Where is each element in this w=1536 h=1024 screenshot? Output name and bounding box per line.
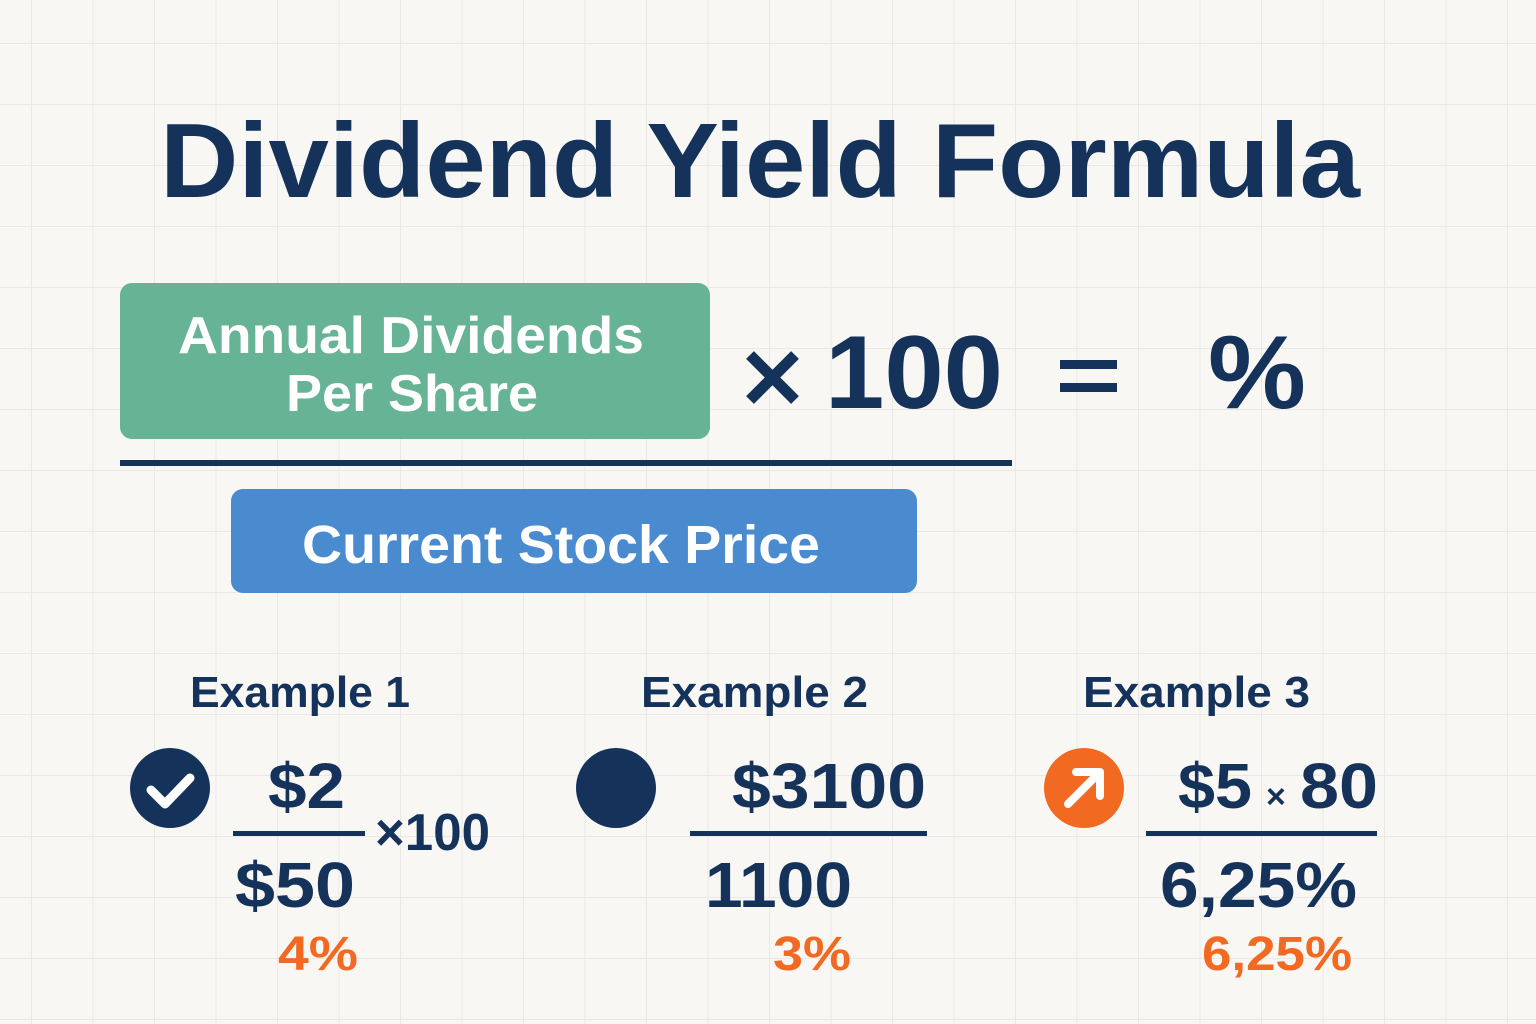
- example 1: $2: [268, 750, 345, 822]
- example 2: 3%: [773, 928, 851, 981]
- icon: check circle: [130, 748, 210, 828]
- denominator box: current stock price: Current Stock Price: [302, 515, 820, 575]
- example 3: 6,25%: [1160, 849, 1357, 921]
- numerator box: annual dividends: Annual Dividends: [178, 307, 644, 365]
- example 1: $50: [235, 849, 355, 921]
- example 2: 1100: [705, 849, 852, 921]
- example 1: 4%: [278, 928, 358, 981]
- title: Dividend Yield Formula: [160, 102, 1361, 220]
- denominator box: current stock price: [231, 489, 917, 593]
- example 2: $3100: [732, 750, 926, 822]
- example 1: Example 1: [190, 668, 410, 717]
- percent sign: %: [1208, 315, 1306, 431]
- example 2: Example 2: [641, 668, 868, 717]
- numerator box: annual dividends: [120, 283, 710, 439]
- example 3: 6,25%: [1202, 928, 1352, 981]
- icon: dark circle: [576, 748, 656, 828]
- multiplier ×100: [750, 315, 1003, 431]
- example 3: [1044, 668, 1378, 981]
- example 3: 80: [1300, 750, 1378, 822]
- example 1: [130, 668, 490, 981]
- equals sign: [1060, 360, 1117, 392]
- icon: orange arrow circle: [1044, 748, 1124, 828]
- example 3: Example 3: [1083, 668, 1310, 717]
- fraction line: [120, 460, 1012, 466]
- example 2: [576, 668, 927, 981]
- example 3: ×: [1266, 778, 1286, 816]
- example 3: $5: [1178, 750, 1252, 822]
- example 1: ×100: [375, 804, 490, 862]
- multiplier ×100: 100: [825, 315, 1003, 431]
- numerator box: annual dividends: Per Share: [286, 365, 538, 423]
